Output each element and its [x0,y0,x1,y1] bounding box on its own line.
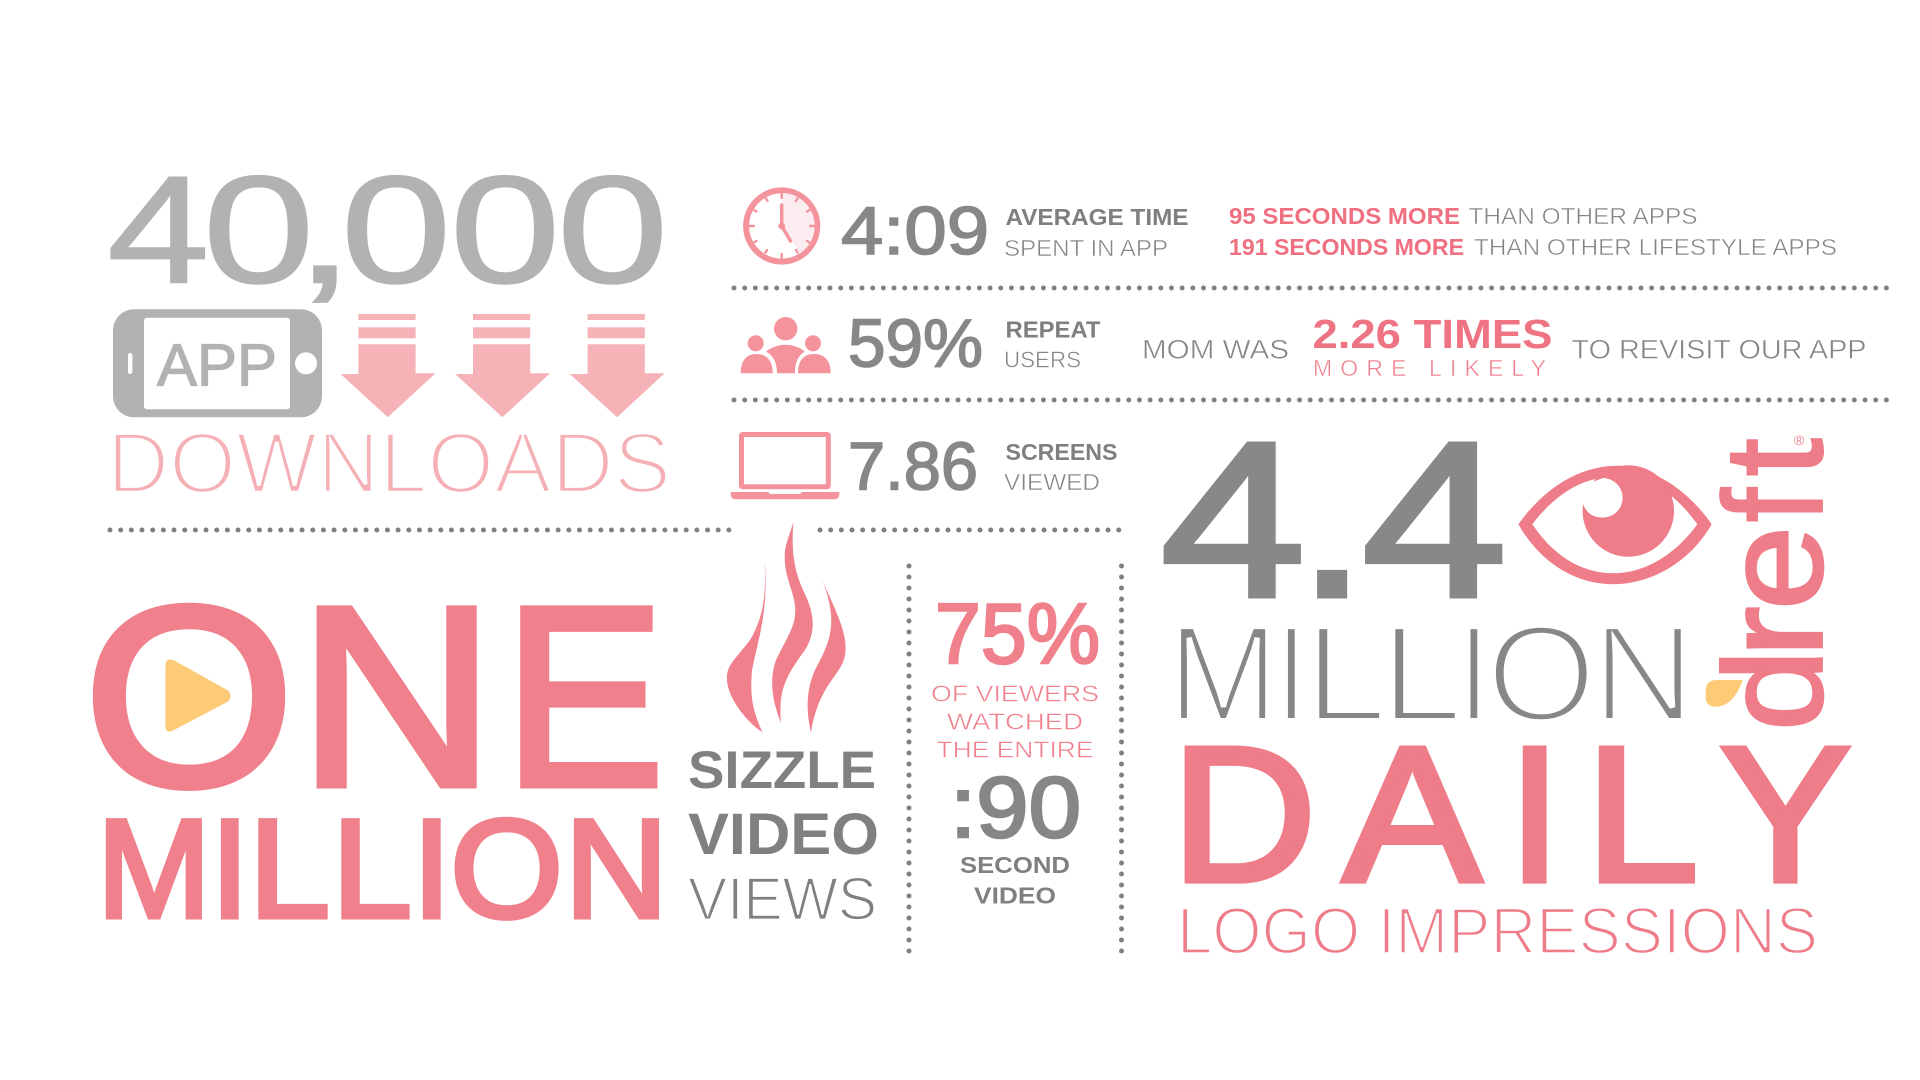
stat: 40,000: , [294,144,356,316]
heading: million: L [1304,598,1387,751]
stat: 40,000: 4 [107,144,210,316]
heading: million: L [332,790,412,947]
text: of viewers watched the entire: WATCHED [947,708,1083,734]
heading: daily: D [1171,707,1316,922]
heading: one: N [298,554,495,840]
logo: dreft: e [1695,526,1852,610]
heading: million: M [97,790,211,947]
heading: million: L [1380,598,1463,751]
heading: million: I [1456,598,1492,751]
label: second video: SECOND [960,852,1070,878]
heading: million: L [249,790,330,947]
text: comparison with other apps: THAN OTHER APPS [1468,203,1698,229]
text: of viewers watched the entire [931,681,1099,762]
text: comparison with other apps: THAN OTHER LIFESTYLE APPS [1474,234,1837,260]
panel: one million views [84,522,879,947]
text: to revisit our app: TO REVISIT OUR APP [1572,334,1866,364]
heading: million: I [1274,598,1309,751]
text: comparison with other apps: 191 SECONDS MORE [1229,234,1464,260]
heading: daily: A [1343,707,1481,922]
stat: 40,000: 0 [203,144,315,316]
heading: million: N [1592,598,1695,751]
icon: droplet [1706,680,1743,707]
stat: 40,000: 0 [341,144,452,316]
label: average time spent in app: SPENT IN APP [1004,235,1168,261]
heading: daily: Y [1720,707,1851,922]
logo: dreft [1695,432,1852,731]
stat: 7.86: 7.86 [848,428,978,504]
label: second video [960,852,1070,908]
label: sizzle video views: VIDEO [688,802,879,867]
icon: flames [727,522,846,733]
label: second video: VIDEO [974,882,1056,908]
icon: play triangle [166,660,230,731]
icon: phone [113,309,322,417]
panel: 4.4 million daily logo impressions [1161,396,1852,968]
logo: dreft: ® [1794,432,1805,448]
text: logo impressions: LOGO IMPRESSIONS [1177,894,1818,968]
stat: 4.4: 4 [1362,396,1507,643]
logo: dreft: r [1695,606,1852,658]
stat: 59%: 59% [848,306,983,382]
text: mom was: MOM WAS [1142,334,1289,364]
label: repeat users: REPEAT [1006,316,1100,342]
icon: phone: APP [157,332,277,398]
logo: dreft: f [1695,487,1852,522]
heading: daily: I [1508,707,1561,922]
label: average time spent in app [1004,204,1188,261]
text: comparison with other apps [1229,203,1837,260]
heading: million: N [565,790,668,947]
icon: people [741,317,831,373]
panel: time in app [746,190,1837,269]
stat: 75%: 75% [935,587,1100,682]
icon: download arrow 1 [341,314,436,417]
label: screens viewed: VIEWED [1004,469,1100,495]
stat: :90: :90 [950,760,1081,856]
icon: clock [746,190,817,262]
heading: million: I [413,790,451,947]
stat: 40,000: 0 [557,144,669,316]
label: repeat users: USERS [1004,346,1081,372]
stat: 4.4: 4 [1161,396,1306,643]
label: sizzle video views: VIEWS [688,866,877,932]
heading: one: E [504,554,664,840]
text: of viewers watched the entire: THE ENTIRE [936,736,1094,762]
icon: download arrow 3 [570,314,665,417]
text: of viewers watched the entire: OF VIEWERS [931,681,1099,707]
label: screens viewed: SCREENS [1006,439,1118,465]
heading: one: O [84,554,294,840]
icon: laptop [731,434,839,499]
panel: repeat users [741,306,1867,382]
logo: dreft: t [1695,438,1852,476]
heading: million: M [1168,598,1279,751]
callout: 2.26 times more likely: 2.26 TIMES [1312,311,1552,357]
stat: 4:09: 4:09 [841,193,989,269]
label: sizzle video views: SIZZLE [688,741,876,800]
label: sizzle video views [688,741,879,932]
icon: download arrow 2 [455,314,550,417]
label: screens viewed [1004,439,1118,495]
label: average time spent in app: AVERAGE TIME [1006,204,1188,230]
heading: daily: L [1585,707,1699,922]
panel: 75% watched [931,587,1100,908]
stat: 4.4: . [1297,396,1368,643]
heading: million: I [211,790,249,947]
callout: 2.26 times more likely [1312,311,1552,381]
dividers [110,288,1892,952]
heading: million: O [450,790,563,947]
text: comparison with other apps: 95 SECONDS MORE [1229,203,1460,229]
callout: 2.26 times more likely: MORE LIKELY [1313,355,1546,381]
stat: 40,000: 0 [450,144,561,316]
heading: downloads: DOWNLOADS [107,416,671,512]
panel: screens viewed [731,428,1118,504]
icon: eye [1518,465,1712,584]
label: repeat users [1004,316,1100,372]
panel: app downloads [107,144,671,512]
heading: million: O [1486,598,1596,751]
logo: dreft: d [1695,649,1852,731]
